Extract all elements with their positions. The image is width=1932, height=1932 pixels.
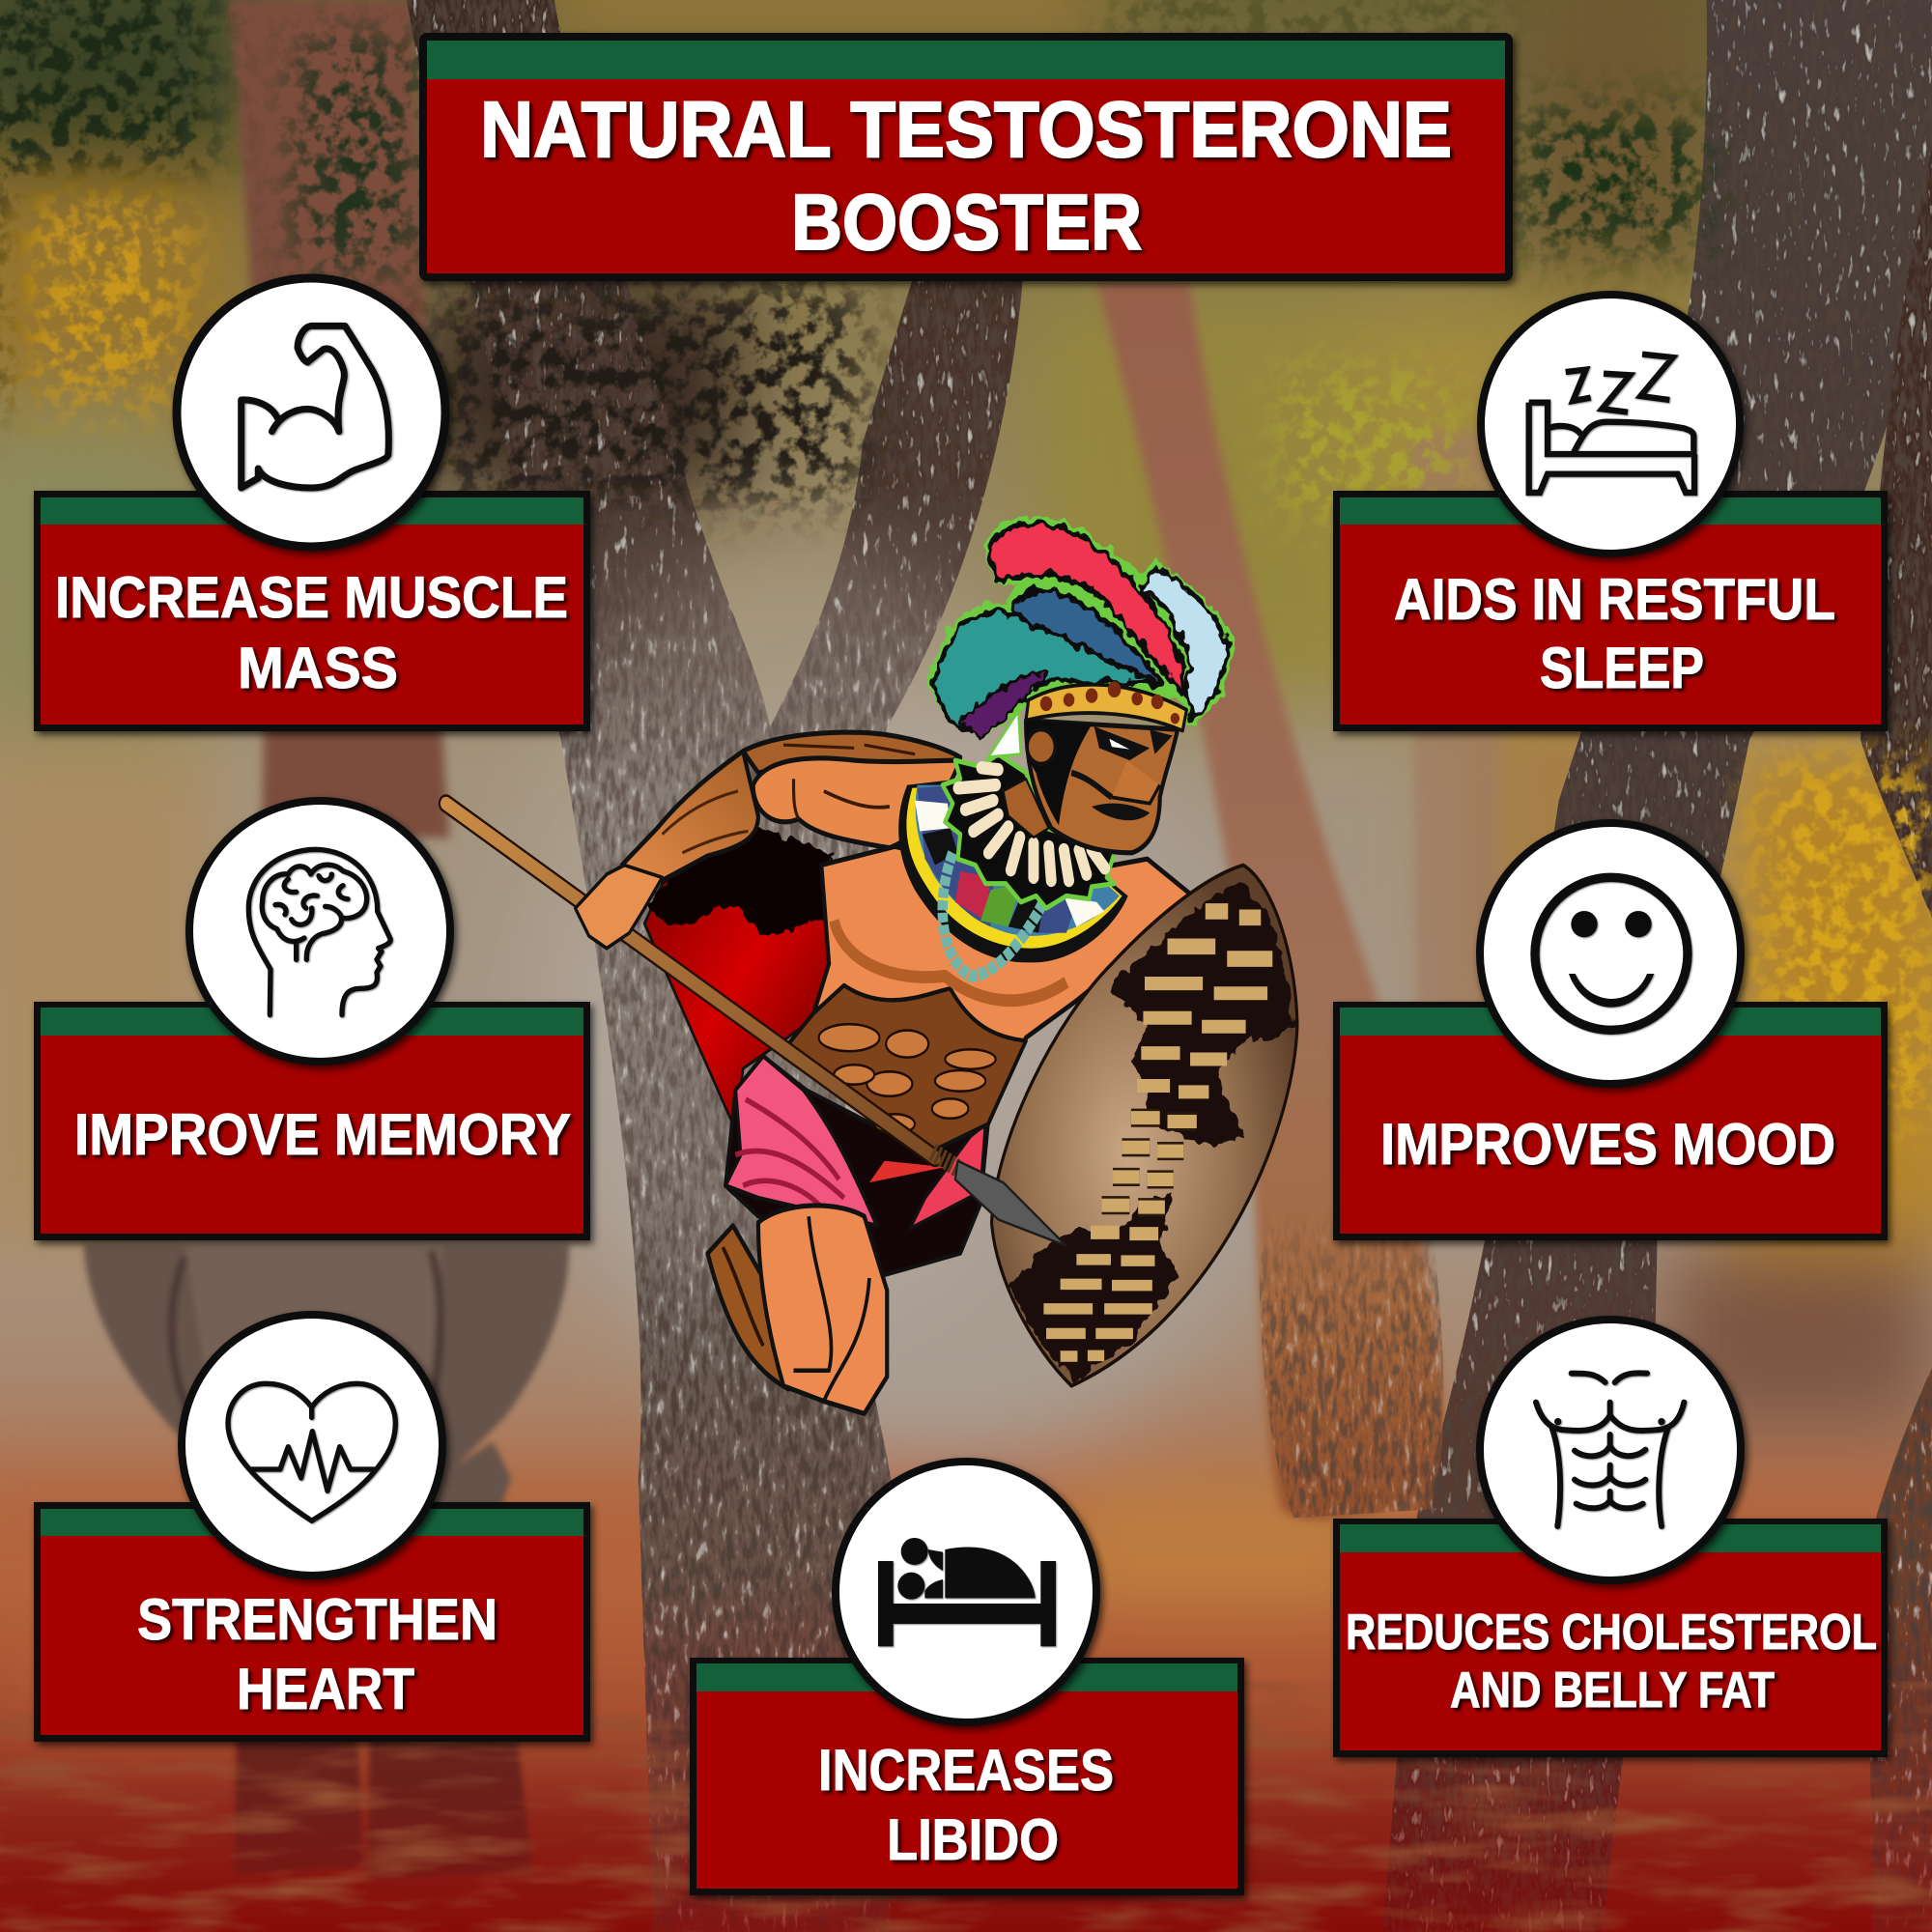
raised back arm <box>622 732 960 881</box>
label <box>1346 1605 1877 1719</box>
label <box>818 1738 1114 1872</box>
gripping hand <box>576 866 663 949</box>
tooth necklace <box>943 754 1115 908</box>
label: STRENGTHEN <box>137 1587 497 1652</box>
label: IMPROVE MEMORY <box>74 1102 571 1167</box>
icon circle: brain head <box>189 801 450 1062</box>
feathers <box>935 522 1228 739</box>
panel: increase muscle mass <box>34 278 590 731</box>
head <box>988 681 1186 853</box>
beaded collar <box>898 779 1128 976</box>
label: AND BELLY FAT <box>1450 1662 1775 1719</box>
label: INCREASE MUSCLE <box>55 565 568 630</box>
label: HEART <box>237 1657 414 1721</box>
legs <box>708 1206 887 1413</box>
icon circle: smiley <box>1480 823 1741 1084</box>
title text: NATURAL TESTOSTERONE <box>480 86 1452 174</box>
title text: BOOSTER <box>791 179 1142 267</box>
icon circle: couple in bed <box>836 1462 1096 1722</box>
label: INCREASES <box>818 1738 1114 1803</box>
panel: improve memory <box>34 801 590 1240</box>
trees <box>228 0 1503 1520</box>
title text <box>480 86 1452 267</box>
icon circle: muscle <box>177 278 445 547</box>
panel: increases libido <box>690 1462 1244 1895</box>
panel: aids in restful sleep <box>1333 295 1888 731</box>
spear <box>446 804 1066 1246</box>
cape <box>644 825 833 1130</box>
label: IMPROVES MOOD <box>1380 1112 1835 1177</box>
torso <box>781 846 1193 1154</box>
loincloth <box>725 1056 988 1275</box>
label: MASS <box>238 636 398 700</box>
warrior mascot illustration <box>446 522 1297 1413</box>
panel: improves mood <box>1333 823 1888 1240</box>
shield <box>992 866 1297 1386</box>
label: LIBIDO <box>887 1807 1059 1872</box>
title banner <box>419 33 1513 281</box>
foliage <box>0 0 1932 1122</box>
label: SLEEP <box>1540 636 1704 700</box>
label <box>1394 567 1835 700</box>
label <box>137 1587 497 1721</box>
icon circle: heartbeat <box>182 1315 442 1576</box>
icon circle: abs <box>1480 1320 1741 1580</box>
label: AIDS IN RESTFUL <box>1394 567 1835 632</box>
panel: reduces cholesterol and belly fat <box>1333 1320 1888 1757</box>
label <box>55 565 568 700</box>
icon circle: sleeping bed <box>1481 295 1740 554</box>
panel: strengthen heart <box>34 1315 590 1742</box>
elephant <box>84 1244 569 1879</box>
